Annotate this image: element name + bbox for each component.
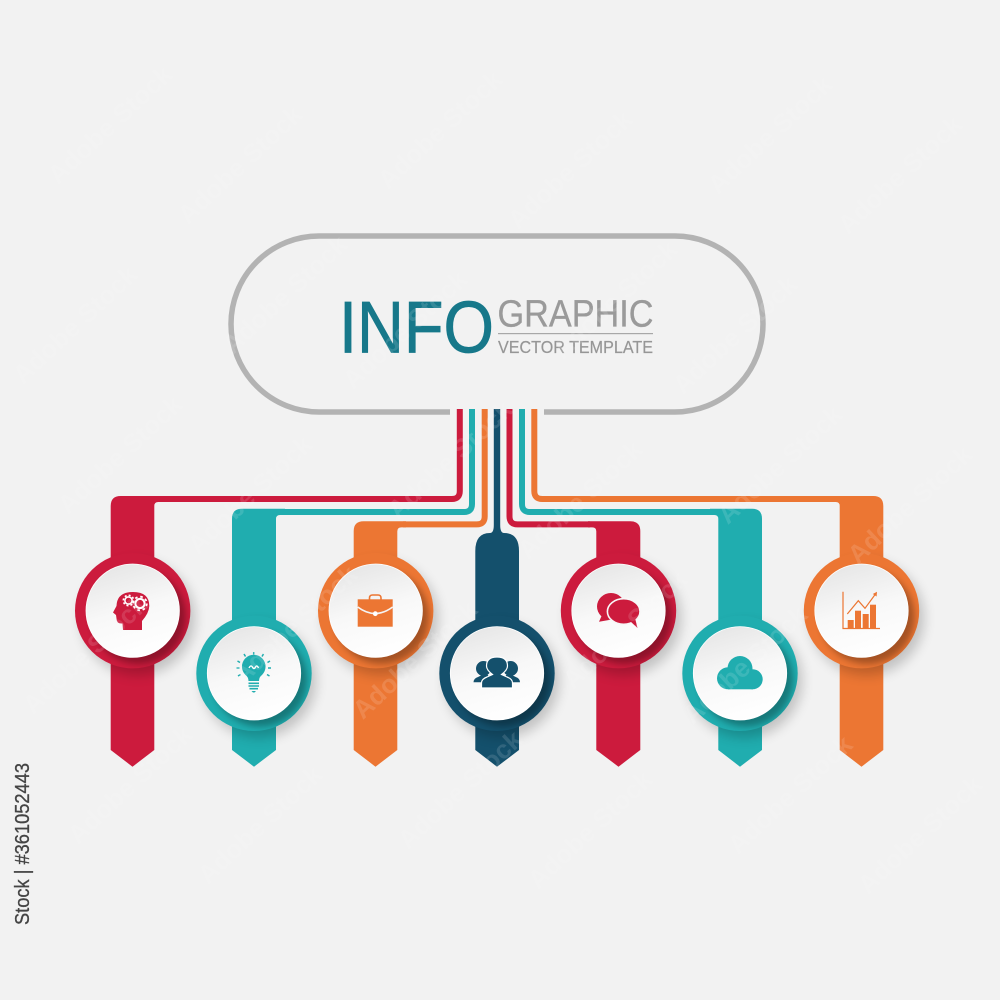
disc shadow <box>820 570 914 664</box>
ring <box>75 553 190 668</box>
ribbon <box>232 509 285 767</box>
disc <box>693 627 787 720</box>
watermark pattern: Adobe Stock <box>182 429 319 560</box>
connector line <box>403 409 485 524</box>
watermark pattern: Adobe Stock <box>832 109 969 240</box>
watermark pattern: Adobe Stock <box>52 389 189 520</box>
watermark pattern: Adobe Stock <box>217 229 354 360</box>
watermark pattern: Adobe Stock <box>392 724 529 855</box>
ring shadow <box>324 561 438 675</box>
disc shadow <box>578 570 672 664</box>
disc <box>86 564 179 657</box>
title block <box>339 287 654 368</box>
panel: teal cloud column <box>522 409 802 767</box>
icon: briefcase <box>358 595 393 627</box>
panel: teal bulb column <box>196 409 472 767</box>
title: INFO: INFO <box>339 287 494 368</box>
panel: red head column <box>75 409 460 767</box>
ring shadow <box>567 561 681 675</box>
disc shadow <box>456 633 550 727</box>
ribbon <box>354 521 406 767</box>
disc <box>572 564 665 657</box>
watermark pattern: Adobe Stock <box>382 394 519 525</box>
ring shadow <box>202 624 316 738</box>
watermark pattern: Adobe Stock <box>557 564 694 695</box>
stock id caption: Stock | #361052443 <box>12 763 34 925</box>
icon: speech bubbles <box>597 593 640 628</box>
connector line <box>510 409 590 524</box>
subtitle: VECTOR TEMPLATE <box>498 337 653 357</box>
panel: navy people column <box>439 409 559 767</box>
connector line <box>160 409 460 499</box>
connector and ribbon <box>475 409 519 767</box>
disc <box>329 564 422 657</box>
panel: orange briefcase column <box>318 409 485 767</box>
watermark pattern: Adobe Stock <box>677 599 814 730</box>
watermark pattern: Adobe Stock <box>17 589 154 720</box>
title underline <box>498 333 653 334</box>
watermark pattern: Adobe Stock <box>667 269 804 400</box>
icon: cloud <box>717 656 763 689</box>
connector line <box>522 409 712 512</box>
icon: head with gears <box>113 592 149 630</box>
watermark pattern: Adobe Stock <box>192 759 329 890</box>
disc shadow <box>213 633 307 727</box>
watermark pattern: Adobe Stock <box>62 719 199 850</box>
icon: people <box>474 657 520 688</box>
disc <box>450 627 544 720</box>
icon: bar chart with arrow <box>843 592 880 628</box>
watermark pattern: Adobe Stock <box>227 559 364 690</box>
panel: orange chart column <box>534 409 924 767</box>
disc shadow <box>335 570 429 664</box>
watermark pattern: Adobe Stock <box>372 64 509 195</box>
watermark pattern: Adobe Stock <box>7 259 144 390</box>
disc <box>815 564 908 657</box>
ring <box>561 553 676 668</box>
watermark pattern: Adobe Stock <box>42 59 179 190</box>
connector line <box>534 409 845 499</box>
ribbon <box>710 509 762 767</box>
icon: light bulb <box>236 652 271 692</box>
watermark pattern: Adobe Stock <box>512 434 649 565</box>
watermark pattern: Adobe Stock <box>547 234 684 365</box>
panel: red speech column <box>510 409 681 767</box>
watermark pattern: Adobe Stock <box>702 69 839 200</box>
watermark pattern: Adobe Stock <box>337 264 474 395</box>
watermark pattern: Adobe Stock <box>712 399 849 530</box>
watermark pattern: Adobe Stock <box>502 104 639 235</box>
title: GRAPHIC: GRAPHIC <box>498 294 654 336</box>
disc <box>207 627 301 720</box>
watermark pattern: Adobe Stock <box>722 729 859 860</box>
ribbon <box>588 521 640 767</box>
ring shadow <box>445 624 559 738</box>
ring <box>196 616 312 731</box>
ring <box>804 553 919 668</box>
watermark pattern: Adobe Stock <box>852 769 989 900</box>
ring shadow <box>81 561 195 675</box>
ring <box>439 616 555 731</box>
title pill outline <box>231 236 763 412</box>
ring shadow <box>810 561 924 675</box>
watermark pattern: Adobe Stock <box>347 594 484 725</box>
watermark pattern: Adobe Stock <box>842 439 979 570</box>
watermark pattern: Adobe Stock <box>522 764 659 895</box>
ring <box>682 616 798 731</box>
ribbon <box>830 496 883 767</box>
disc shadow <box>699 633 793 727</box>
watermark pattern: Adobe Stock <box>172 99 309 230</box>
disc shadow <box>92 570 186 664</box>
connector line <box>282 409 472 512</box>
ribbon <box>111 496 165 767</box>
ring <box>318 553 433 668</box>
ring shadow <box>688 624 802 738</box>
